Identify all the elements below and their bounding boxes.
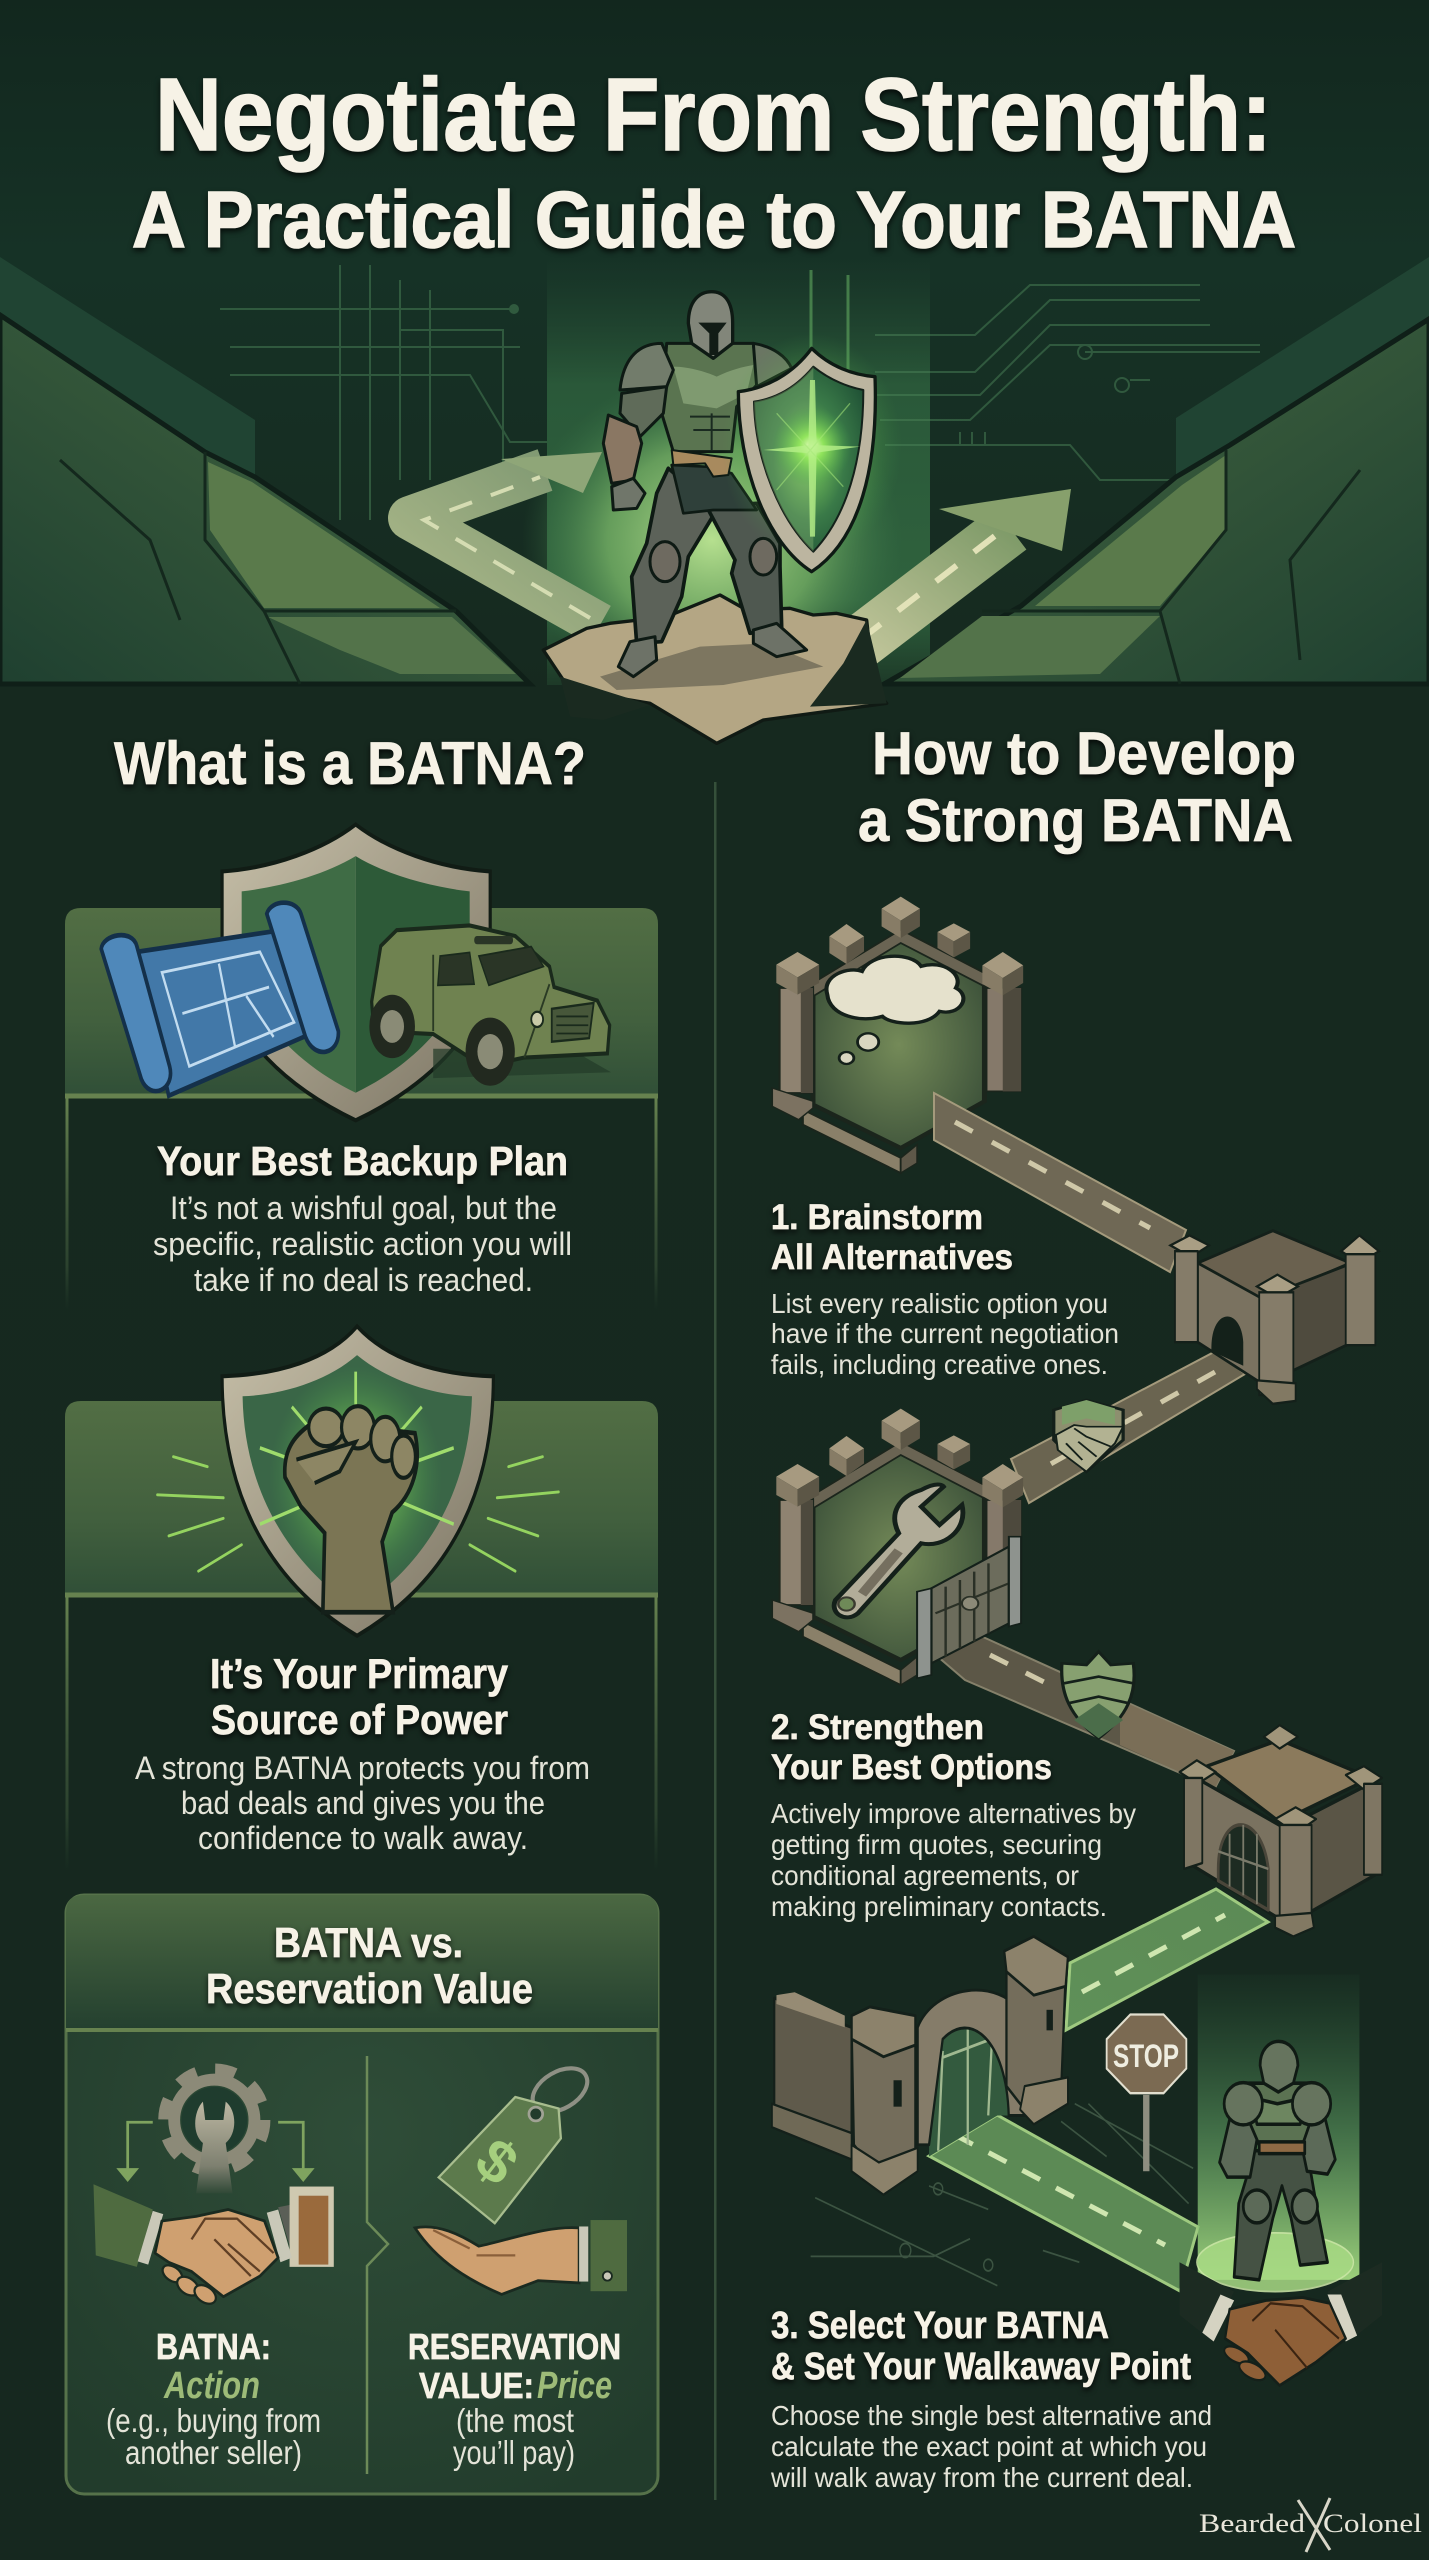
left road arrow (410, 452, 602, 625)
panel heading: Reservation Value (206, 1965, 533, 2012)
hips (672, 465, 757, 513)
step 3 text: will walk away from the current deal. (770, 2462, 1193, 2493)
divider with chevron (367, 2056, 388, 2474)
fort: gatehouse small (1170, 1231, 1379, 1404)
card text (153, 1190, 572, 1298)
knight on rock (543, 292, 902, 743)
BATNA label (106, 2326, 321, 2471)
BATNA label: Action (163, 2365, 260, 2407)
right road arrow (850, 489, 1071, 650)
step 2 text: conditional agreements, or (771, 1860, 1079, 1891)
step 3 text: Choose the single best alternative and (771, 2400, 1212, 2431)
step 1 heading (771, 1198, 1013, 1277)
card text (135, 1750, 590, 1856)
step 2 heading: 2. Strengthen (771, 1708, 984, 1747)
energy rays (157, 1457, 559, 1571)
knight figure (1220, 2041, 1335, 2280)
shield icon (222, 824, 490, 1120)
step 1 heading: 1. Brainstorm (771, 1198, 983, 1237)
step 2 text: making preliminary contacts. (771, 1891, 1107, 1922)
step 3 text (770, 2400, 1212, 2493)
panel header band (65, 908, 658, 1096)
left lower rock band (268, 617, 516, 674)
title: A Practical Guide to Your BATNA (132, 175, 1296, 264)
right lit rock strip (1035, 455, 1226, 606)
step 1 text: fails, including creative ones. (771, 1349, 1108, 1380)
castle gate wall and towers (772, 1936, 1068, 2195)
logo: Bearded Colonel: Bearded (1199, 2509, 1305, 2538)
step 3 heading: 3. Select Your BATNA (771, 2305, 1109, 2347)
panel: BATNA vs reservation value (66, 1895, 658, 2494)
stop sign label: STOP (1113, 2038, 1179, 2074)
panel: primary source of power (65, 1326, 658, 1870)
card text: A strong BATNA protects you from (135, 1750, 590, 1786)
step 3 text: calculate the exact point at which you (771, 2431, 1207, 2462)
road: fort 1 to gatehouse (934, 1093, 1186, 1272)
icon: handshake badge (1054, 1400, 1123, 1472)
reservation value label: RESERVATION (408, 2326, 621, 2367)
step 3 heading: & Set Your Walkaway Point (771, 2346, 1191, 2388)
icon: crossed tools (1298, 2498, 1330, 2552)
panel header band (65, 1401, 658, 1595)
card text: take if no deal is reached. (194, 1262, 533, 1298)
reservation value label: you’ll pay) (453, 2434, 575, 2471)
torso (662, 343, 758, 452)
glow behind knight (522, 370, 902, 710)
rock (543, 595, 887, 743)
BATNA label: (e.g., buying from (106, 2402, 321, 2439)
step 2 text (771, 1798, 1136, 1922)
icon: final handshake (1180, 2262, 1382, 2385)
card heading (210, 1650, 509, 1743)
arms (620, 387, 667, 437)
panel: your best backup plan (65, 824, 658, 1310)
BATNA label: another seller) (125, 2434, 302, 2471)
green road to knight (929, 2115, 1198, 2291)
card heading: It’s Your Primary (210, 1650, 509, 1697)
right upper stone wedge (1176, 257, 1429, 477)
hero glow beam (547, 257, 930, 685)
step 1 text (771, 1288, 1119, 1380)
logo: Bearded Colonel: Colonel (1323, 2509, 1422, 2538)
panel header band (66, 1895, 658, 2029)
icon: price tag (439, 2059, 595, 2223)
BATNA label: BATNA: (156, 2326, 271, 2367)
heading: how to develop: How to Develop (872, 720, 1296, 787)
circuit lines left (220, 265, 547, 520)
belt (672, 450, 732, 477)
green road to gate (1066, 1889, 1268, 2030)
fort: brainstorm (772, 897, 1023, 1173)
right rock cliff (884, 319, 1429, 684)
circuit lines right (875, 285, 1260, 480)
gate opening (929, 2018, 1011, 2157)
shield with fist icon (222, 1326, 493, 1636)
card text: It’s not a wishful goal, but the (170, 1190, 557, 1226)
icon: gear and wrench (116, 2070, 315, 2193)
knight spotlight (1197, 1975, 1359, 2292)
panel heading: BATNA vs. (274, 1919, 463, 1966)
logo: Bearded Colonel (1199, 2498, 1422, 2552)
reservation value label: (the most (456, 2402, 574, 2439)
shield (722, 333, 902, 560)
card heading: Your Best Backup Plan (157, 1138, 568, 1184)
rock cracks (60, 450, 1360, 684)
icon: wrench (834, 1484, 963, 1617)
step 1 text: have if the current negotiation (771, 1318, 1119, 1349)
iron gate (917, 1537, 1021, 1678)
road: fort 2 to gatehouse 2 (930, 1627, 1234, 1788)
card text: bad deals and gives you the (181, 1785, 545, 1821)
icon: open hand (415, 2220, 627, 2294)
icon: blueprint scroll (101, 903, 338, 1096)
step 3 heading (771, 2305, 1191, 2388)
panel body (66, 1895, 658, 2494)
road: gatehouse to fort 2 (1011, 1351, 1245, 1503)
left upper stone wedge (0, 257, 255, 477)
reservation value label: VALUE: (419, 2365, 534, 2406)
reservation value label: Price (537, 2365, 612, 2407)
title: Negotiate From Strength: (155, 57, 1272, 172)
center divider (714, 782, 716, 2500)
title (132, 57, 1296, 264)
reservation value label (408, 2326, 621, 2471)
hero illustration (0, 257, 1429, 743)
step 2 heading: Your Best Options (771, 1748, 1052, 1787)
heading: how to develop (858, 720, 1296, 854)
left rock cliff (0, 315, 530, 684)
helmet (688, 292, 733, 358)
step 2 text: getting firm quotes, securing (771, 1829, 1102, 1860)
step 1 heading: All Alternatives (771, 1238, 1013, 1277)
step 1 text: List every realistic option you (771, 1288, 1108, 1319)
step 2 heading (771, 1708, 1052, 1787)
icon: thought cloud (826, 956, 963, 1064)
icon: stop sign (1107, 2015, 1186, 2171)
card text: confidence to walk away. (198, 1820, 528, 1856)
heading: how to develop: a Strong BATNA (858, 787, 1293, 854)
legs (632, 468, 717, 643)
light rays (811, 270, 848, 420)
card heading: Source of Power (211, 1696, 508, 1743)
icon: price tag: $ (463, 2125, 531, 2198)
heading: what is a BATNA: What is a BATNA? (114, 730, 586, 797)
fort: strengthen (772, 1409, 1023, 1685)
fort: gatehouse with portcullis (1180, 1725, 1382, 1936)
right lower rock band (900, 616, 1160, 678)
card text: specific, realistic action you will (153, 1226, 572, 1262)
step 2 text: Actively improve alternatives by (771, 1798, 1136, 1829)
left lit rock strip (208, 462, 440, 608)
circuit floor lines (811, 2104, 1193, 2286)
icon: armored vehicle (369, 925, 611, 1086)
icon: handshake and door (93, 2184, 334, 2308)
panel heading (206, 1919, 533, 2012)
icon: shield badge (1062, 1652, 1134, 1738)
